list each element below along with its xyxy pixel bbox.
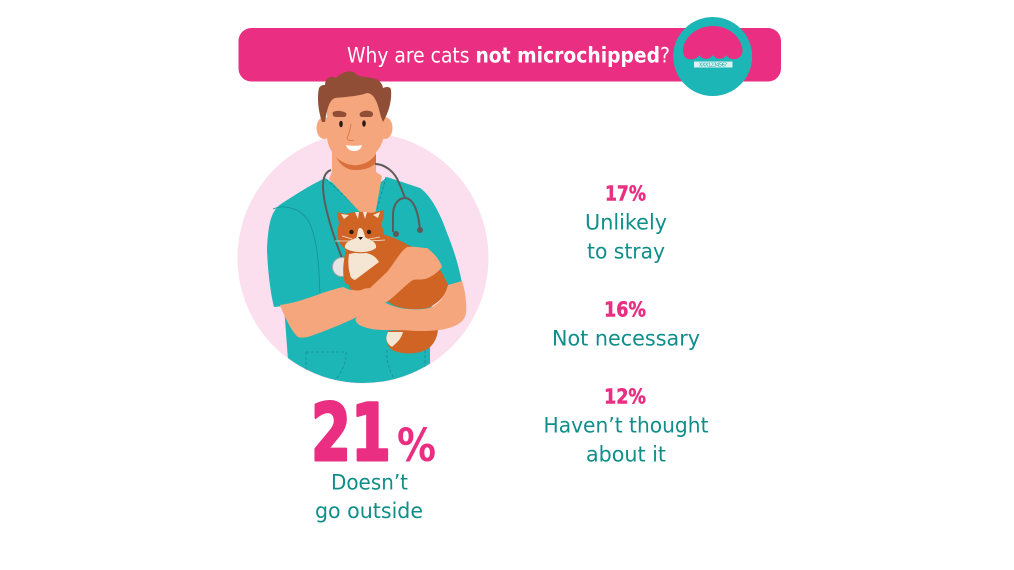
scrubs [267,177,462,400]
eyes [339,121,343,127]
smile [346,145,362,151]
chest piece [332,258,352,276]
stat: 16 percent not necessary: 16% [604,298,646,322]
stat: 21 percent: 21 [311,389,391,479]
stethoscope tips [393,231,399,237]
far arm [356,281,466,331]
illustration: vet holding cat [267,71,466,400]
face [327,90,385,164]
cat ears and stripes [341,212,380,219]
cat eyes [349,230,354,234]
stat: 12 percent haven't thought about it [544,384,708,466]
stat: 12 percent haven't thought about it: Haven’t thought [544,414,708,438]
cat paw [349,284,365,290]
nose [347,124,354,141]
stat: 17 percent unlikely to stray: to stray [587,240,665,264]
neck shadow [336,154,376,170]
tail tip [386,332,403,347]
cat tail [386,328,438,353]
cat nose [358,237,363,240]
neck [329,148,382,226]
pink circle backdrop [238,132,488,384]
ears [316,117,332,139]
stat: 21 percent: % [397,419,436,472]
cat muzzle [345,228,376,252]
near arm [280,247,442,338]
cat whiskers [335,236,385,241]
stat: 17 percent unlikely to stray [585,182,667,264]
badge: microchip logo [673,17,752,96]
cat head [337,210,384,253]
stat: 16 percent not necessary: Not necessary [552,326,700,350]
stat: 16 percent not necessary [552,298,700,350]
stat: 17 percent unlikely to stray: 17% [605,182,646,206]
cat body [343,232,448,309]
stat: 12 percent haven't thought about it: about it [586,442,666,466]
label: doesn't go outside [315,470,423,523]
eyebrows [333,111,373,117]
stat: 12 percent haven't thought about it: 12% [604,384,646,408]
header bar [238,28,781,82]
cat chest [348,252,379,280]
label: doesn't go outside: Doesn’t [331,470,408,494]
stat: 17 percent unlikely to stray: Unlikely [585,210,667,234]
title: Why are cats not microchipped? [347,44,670,68]
label: doesn't go outside: go outside [315,499,423,523]
hair [318,71,391,122]
stethoscope [323,164,420,258]
badge: microchip logo: XXX123456? [699,62,727,68]
